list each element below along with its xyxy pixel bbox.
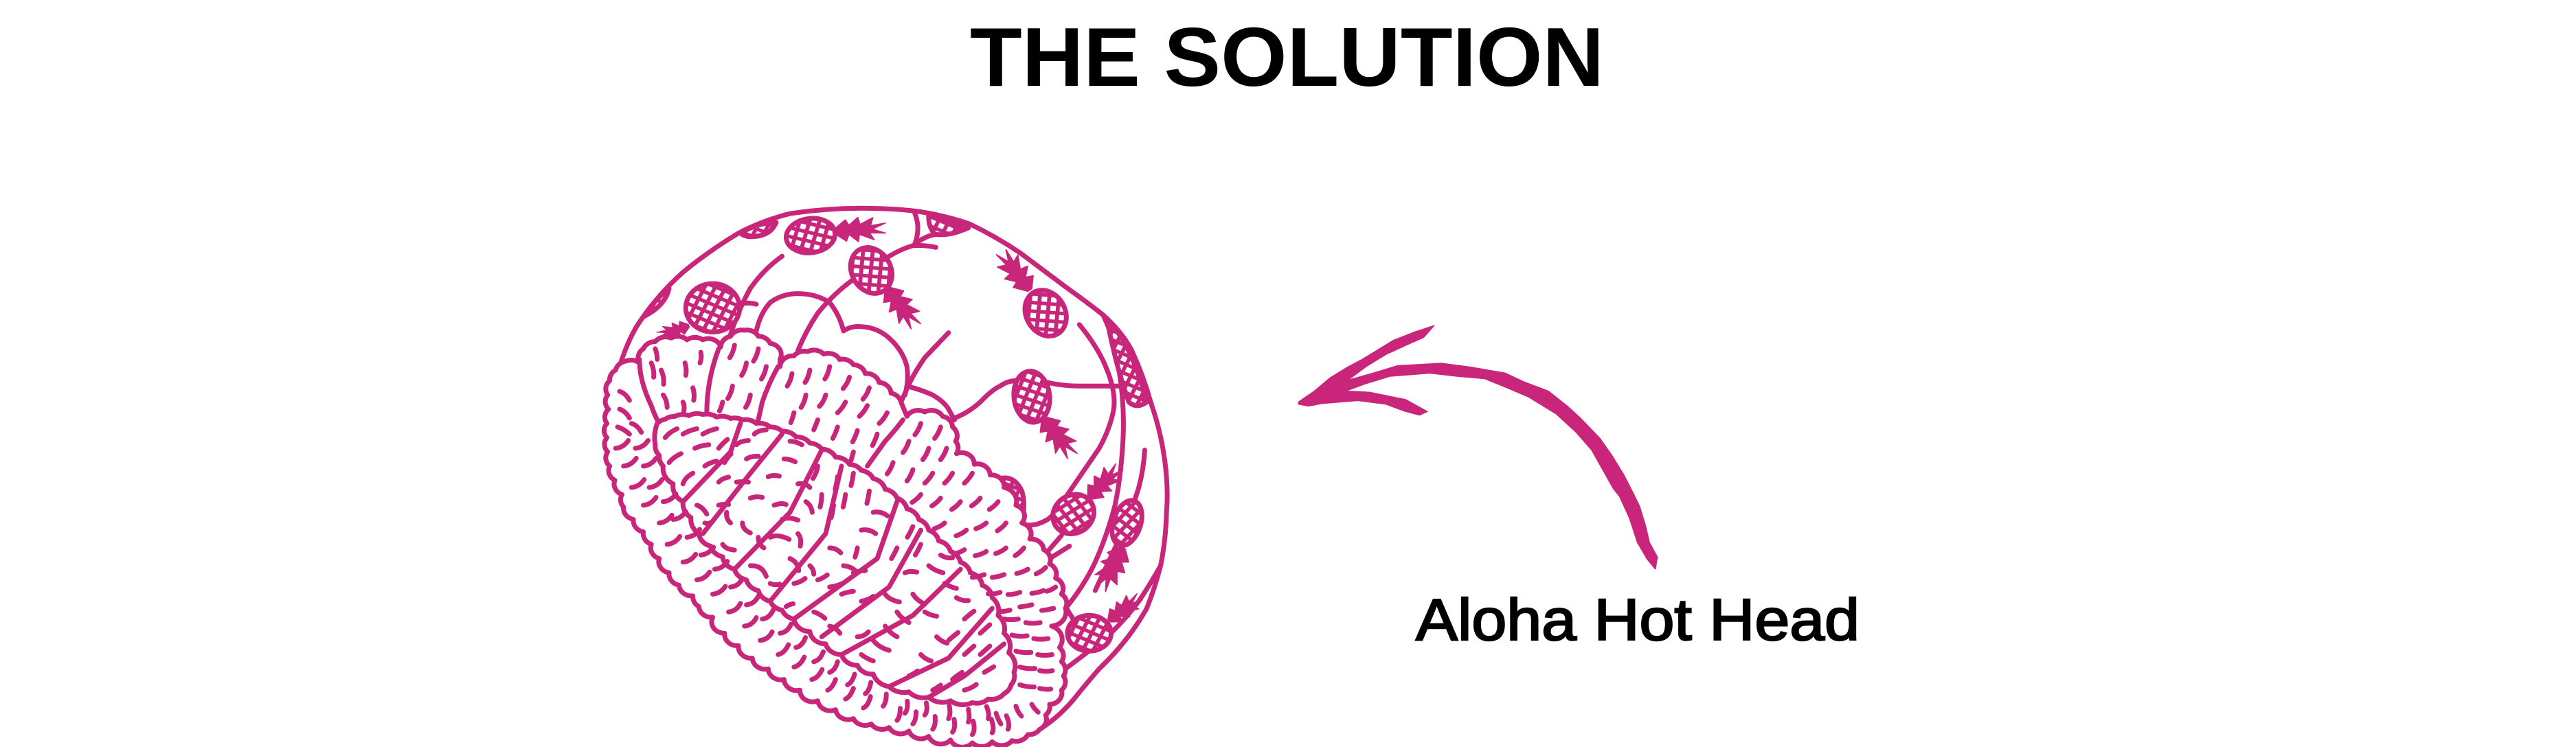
brim scalloped outline [604, 330, 1067, 747]
brim fold seams [640, 349, 903, 466]
crown inner seams [730, 214, 1161, 669]
pineapple leaves [655, 216, 1147, 628]
knit stitches: inner panels [665, 428, 994, 690]
brim ribs [683, 424, 1004, 698]
arrow caption: Aloha Hot Head [1416, 588, 1860, 653]
knit stitches: right diagonal band [887, 424, 1056, 612]
crown outline [620, 208, 1167, 729]
arrow pointing at beanie [1298, 325, 1658, 569]
brim inner edge [655, 413, 1015, 704]
pineapple motifs [644, 215, 1147, 651]
title: THE SOLUTION [970, 10, 1604, 104]
knit stitches: left and top folds [618, 345, 887, 461]
knit stitches: right band lower [996, 619, 1052, 724]
icon: pink knit beanie with pineapple pattern [604, 208, 1167, 747]
knit stitches: outer band [615, 441, 1009, 735]
